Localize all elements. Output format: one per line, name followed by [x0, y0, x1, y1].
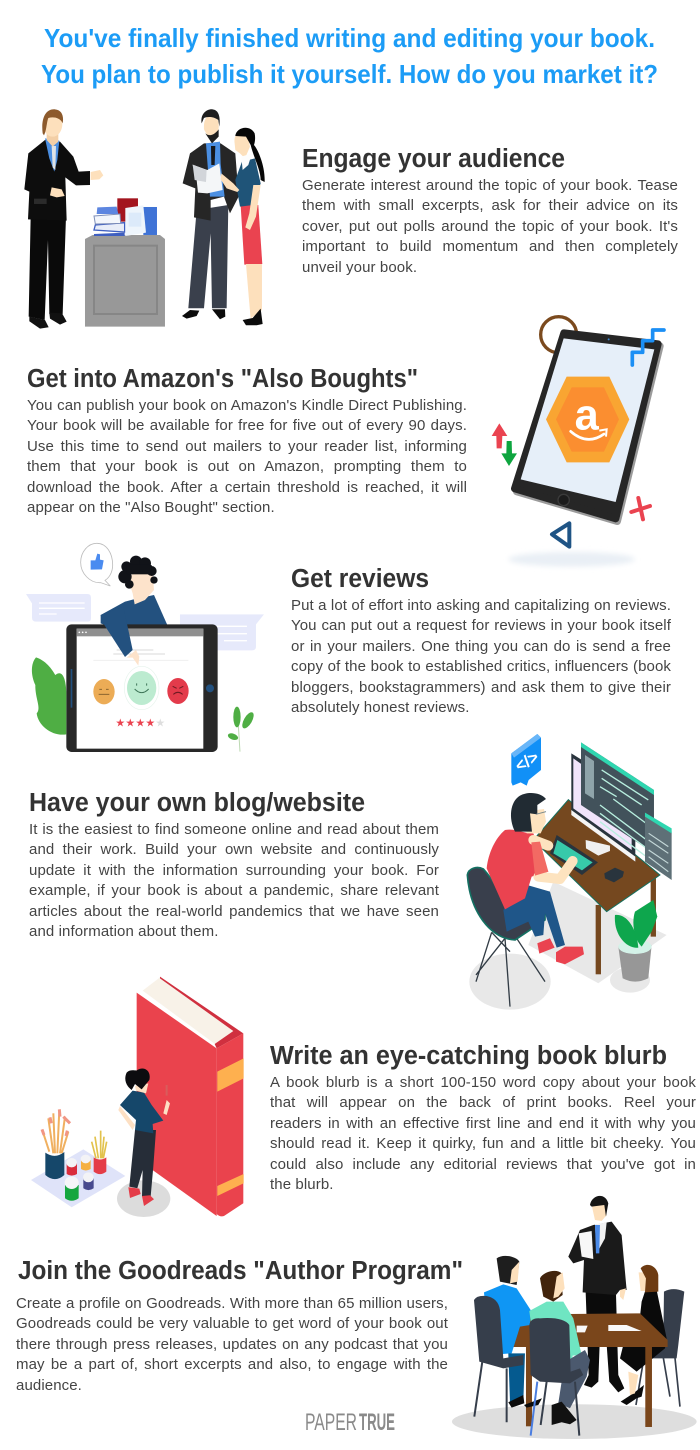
text block: get reviews: copy of the book to established critics, influencers (book — [291, 658, 671, 675]
figure: table with books — [85, 198, 165, 327]
icon: Amazon hexagon logo: a — [575, 391, 600, 439]
text block: own blog or website: update it with the information surrounding your book. For — [29, 862, 439, 879]
text block: book blurb: that will appear on the back of print books. Reel your — [270, 1094, 696, 1111]
icon: paint palette table — [31, 1149, 125, 1207]
figure: standing man presenting — [568, 1196, 627, 1392]
text block: own blog or website — [29, 821, 439, 940]
icon: large leaf — [32, 657, 66, 735]
illustration: business people presenting books — [24, 109, 265, 329]
text block: book blurb: A book blurb is a short 100-150 word copy about your book — [270, 1074, 696, 1091]
text block: engage your audience: unveil your book. — [302, 259, 417, 276]
icon: keyboard and mouse — [550, 835, 624, 882]
icon: star rating — [115, 716, 165, 729]
text block: get reviews: bloggers, bookstagrammers) and ask them to give their — [291, 679, 671, 696]
text block: engage your audience: important to build momentum and then completely — [302, 238, 678, 255]
text block: Amazon Also Boughts — [27, 397, 467, 516]
title: You plan to publish it yourself. How do you market it? — [41, 59, 658, 89]
figure: woman in red skirt — [221, 128, 265, 325]
icon: star rating: ★ — [155, 716, 165, 729]
text block: Amazon Also Boughts: them that your book is out on Amazon, prompting them to — [27, 458, 467, 475]
text block: Amazon Also Boughts: Use this time to send out mailers to your reader list, informing — [27, 438, 467, 455]
icon: code speech bubble: </> — [512, 747, 542, 776]
illustration: tablet with Amazon logo — [492, 317, 664, 567]
icon: floor shadows — [469, 882, 667, 1010]
icon: thumbs up bubble — [81, 543, 113, 586]
title: You've finally finished writing and editing your book. — [44, 23, 655, 53]
text block: Amazon Also Boughts: appear on the "Also Bought" section. — [27, 499, 275, 516]
text block: book blurb: the blurb. — [270, 1176, 334, 1193]
illustration: meeting around table — [452, 1196, 697, 1439]
heading: book blurb: Write an eye-catching book blurb — [270, 1042, 667, 1070]
text block: Goodreads Author Program: may be a part of, short excerpts and also, to engage with the — [16, 1356, 448, 1373]
icon: small plant — [227, 707, 256, 752]
heading: own blog or website: Have your own blog/website — [29, 789, 365, 817]
icon: floor shadow — [452, 1404, 697, 1439]
title — [41, 23, 658, 89]
text block: get reviews: absolutely honest reviews. — [291, 699, 470, 716]
text block: Amazon Also Boughts: download the book. After a certain threshold is reached, it will — [27, 479, 467, 496]
text block: Amazon Also Boughts: You can publish your book on Amazon's Kindle Direct Publishing. — [27, 397, 467, 414]
icon: star rating: ★ — [115, 716, 125, 729]
icon: giant red book — [137, 977, 244, 1216]
text block: own blog or website: example, if your book is about a pandemic, share relevant — [29, 882, 439, 899]
text block: Goodreads Author Program — [16, 1295, 448, 1394]
logo: Paper True: PAPER — [305, 1409, 357, 1436]
icon: star rating: ★ — [125, 716, 135, 729]
text block: Amazon Also Boughts: Your book will be available for free for five out of every 90 days. — [27, 417, 467, 434]
icon: brush pot — [42, 1109, 70, 1179]
text block: get reviews: Put a lot of effort into asking and capitalizing on reviews. — [291, 597, 671, 614]
illustration: woman painting a giant book — [31, 977, 244, 1217]
figure: woman painting — [118, 1068, 170, 1206]
icon: review tablet — [66, 607, 218, 752]
text block: engage your audience: them with small excerpts, ask for their advice on its — [302, 197, 678, 214]
icon: green down arrow — [501, 441, 517, 466]
icon: monitors with code — [571, 742, 672, 880]
illustration: developer at desk — [467, 734, 672, 1010]
figure: man in mint shirt with chair — [529, 1271, 590, 1436]
text block: book blurb: should read it. Keep it quirky, fun and a little bit cheeky. You — [270, 1135, 696, 1152]
icon: neutral orange face — [93, 679, 115, 704]
icon: code speech bubble — [511, 734, 542, 786]
figure: developer — [467, 793, 584, 1007]
heading: engage your audience: Engage your audience — [302, 145, 565, 173]
text block: engage your audience: Generate interest around the topic of your book. Tease — [302, 177, 678, 194]
icon: angry red face — [167, 678, 189, 704]
icon: meeting table — [507, 1313, 668, 1427]
icon: red cross — [631, 498, 650, 519]
text block: Goodreads Author Program: Create a profile on Goodreads. With more than 65 million users, — [16, 1295, 448, 1312]
icon: potted plant — [615, 900, 657, 982]
illustration: customer review on tablet — [26, 543, 264, 752]
icon: pencil cup — [92, 1131, 107, 1174]
icon: soft floor shadow — [508, 552, 635, 567]
heading: get reviews: Get reviews — [291, 565, 429, 593]
text block: get reviews — [291, 597, 671, 716]
figure: person with curly hair — [101, 556, 167, 632]
text block: own blog or website: and information about them. — [29, 923, 218, 940]
text block: Goodreads Author Program: there through press releases, updates on any podcast that you — [16, 1336, 448, 1353]
text block: engage your audience: cover, put out polls around the topic of your book. It's — [302, 218, 678, 235]
figure: man in black suit gesturing — [24, 109, 103, 329]
text block: book blurb: readers in with an effective first line and end it with why you — [270, 1115, 696, 1132]
text block: own blog or website: It is the easiest to find someone online and read about them — [29, 821, 439, 838]
icon: paint jars — [65, 1155, 94, 1201]
heading: Amazon Also Boughts: Get into Amazon's "Also Boughts" — [27, 365, 418, 393]
text block: Goodreads Author Program: audience. — [16, 1377, 82, 1394]
figure: woman seated right with chair — [618, 1265, 684, 1407]
icon: desk — [533, 800, 660, 974]
icon: smiling green face — [124, 666, 159, 710]
icon: blue triangle — [552, 523, 569, 547]
icon: left speech bubble — [26, 594, 91, 622]
figure: man with papers — [182, 109, 239, 319]
text block: engage your audience — [302, 177, 678, 276]
figure: man in blue shirt with chair — [474, 1256, 542, 1422]
heading: Goodreads Author Program: Join the Goodreads "Author Program" — [18, 1257, 463, 1285]
icon: star rating: ★ — [135, 716, 145, 729]
icon: star rating: ★ — [145, 716, 155, 729]
icon: brown ring — [541, 317, 577, 353]
icon: Amazon hexagon logo — [546, 377, 629, 462]
icon: red up arrow — [492, 423, 507, 448]
logo: Paper True: TRUE — [359, 1409, 395, 1436]
icon: tablet — [515, 333, 660, 521]
icon: floor shadow — [117, 1180, 170, 1217]
text block: get reviews: or in your mailers. One thing you can do is send a free — [291, 638, 671, 655]
icon: blue zigzag — [632, 330, 664, 365]
text block: book blurb: could also include any editorial reviews that you've got in — [270, 1156, 696, 1173]
text block: own blog or website: articles about the real-world pandemics that we have seen — [29, 903, 439, 920]
text block: Goodreads Author Program: Goodreads could be very valuable to get word of your book out — [16, 1315, 448, 1332]
text block: own blog or website: and their work. Build your own website and continuously — [29, 841, 439, 858]
text block: book blurb — [270, 1074, 696, 1193]
icon: right speech bubble — [180, 614, 264, 650]
text block: get reviews: You can put out a request for reviews in your book itself — [291, 617, 671, 634]
